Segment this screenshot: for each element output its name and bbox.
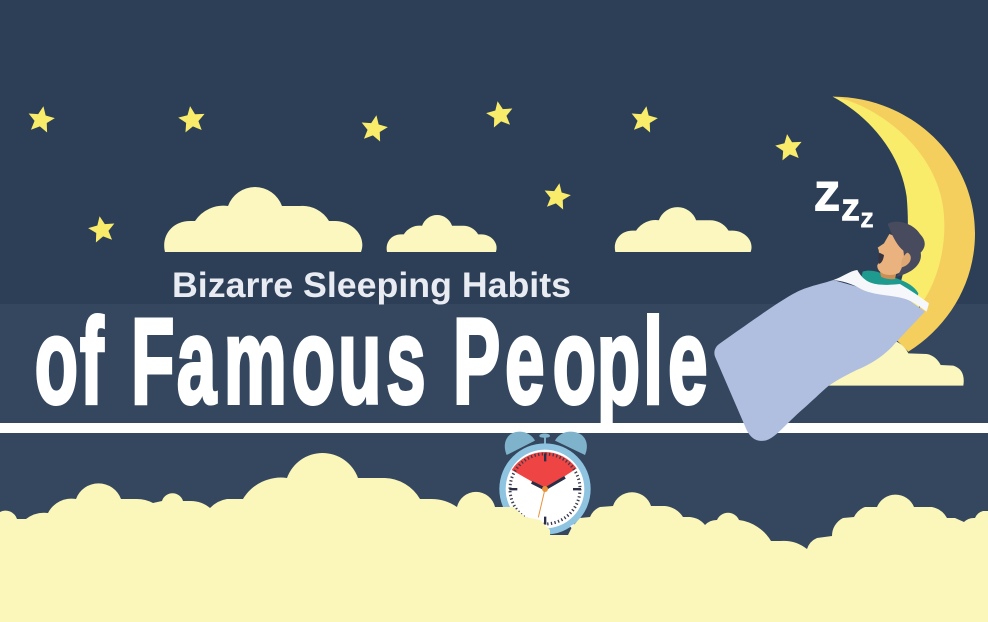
man: face	[877, 234, 909, 275]
clock: hour marks	[509, 453, 581, 525]
clock: centre pin	[542, 486, 548, 492]
small clouds in the sky	[164, 187, 752, 252]
clock: hands	[532, 477, 565, 489]
man: hair	[888, 222, 925, 277]
clock: bell left	[505, 432, 535, 455]
man: open mouth	[878, 253, 884, 264]
moon with sleeping man	[714, 97, 975, 441]
man: shirt	[860, 271, 918, 300]
clock: dial	[506, 450, 584, 528]
subtitle: Bizarre Sleeping Habits	[172, 266, 571, 305]
white divider line	[0, 423, 988, 433]
man: neck	[880, 272, 897, 279]
cloud under the moon	[828, 342, 964, 386]
clock: ring	[499, 443, 591, 535]
snoring letters: Z	[842, 195, 859, 227]
clock: foot	[570, 524, 581, 537]
clock: top knob	[539, 433, 550, 444]
alarm clock	[499, 432, 591, 537]
clock: bell right	[555, 432, 587, 455]
stars	[26, 99, 804, 243]
blanket	[714, 280, 925, 441]
main title: of Famous People	[35, 294, 708, 430]
man: ear	[901, 253, 911, 267]
clock: minute ticks	[510, 454, 580, 524]
snoring letters: Z	[815, 175, 839, 219]
clock: second hand	[538, 489, 545, 517]
blanket: white fold	[833, 270, 929, 312]
clock: red sector	[512, 452, 577, 489]
foreground cloud bank	[0, 453, 988, 622]
snoring letters: Z	[861, 210, 873, 232]
snoring letters	[815, 175, 873, 232]
moon: outer crescent	[833, 97, 975, 352]
moon: inner crescent	[833, 97, 944, 313]
background: title band	[0, 304, 988, 622]
